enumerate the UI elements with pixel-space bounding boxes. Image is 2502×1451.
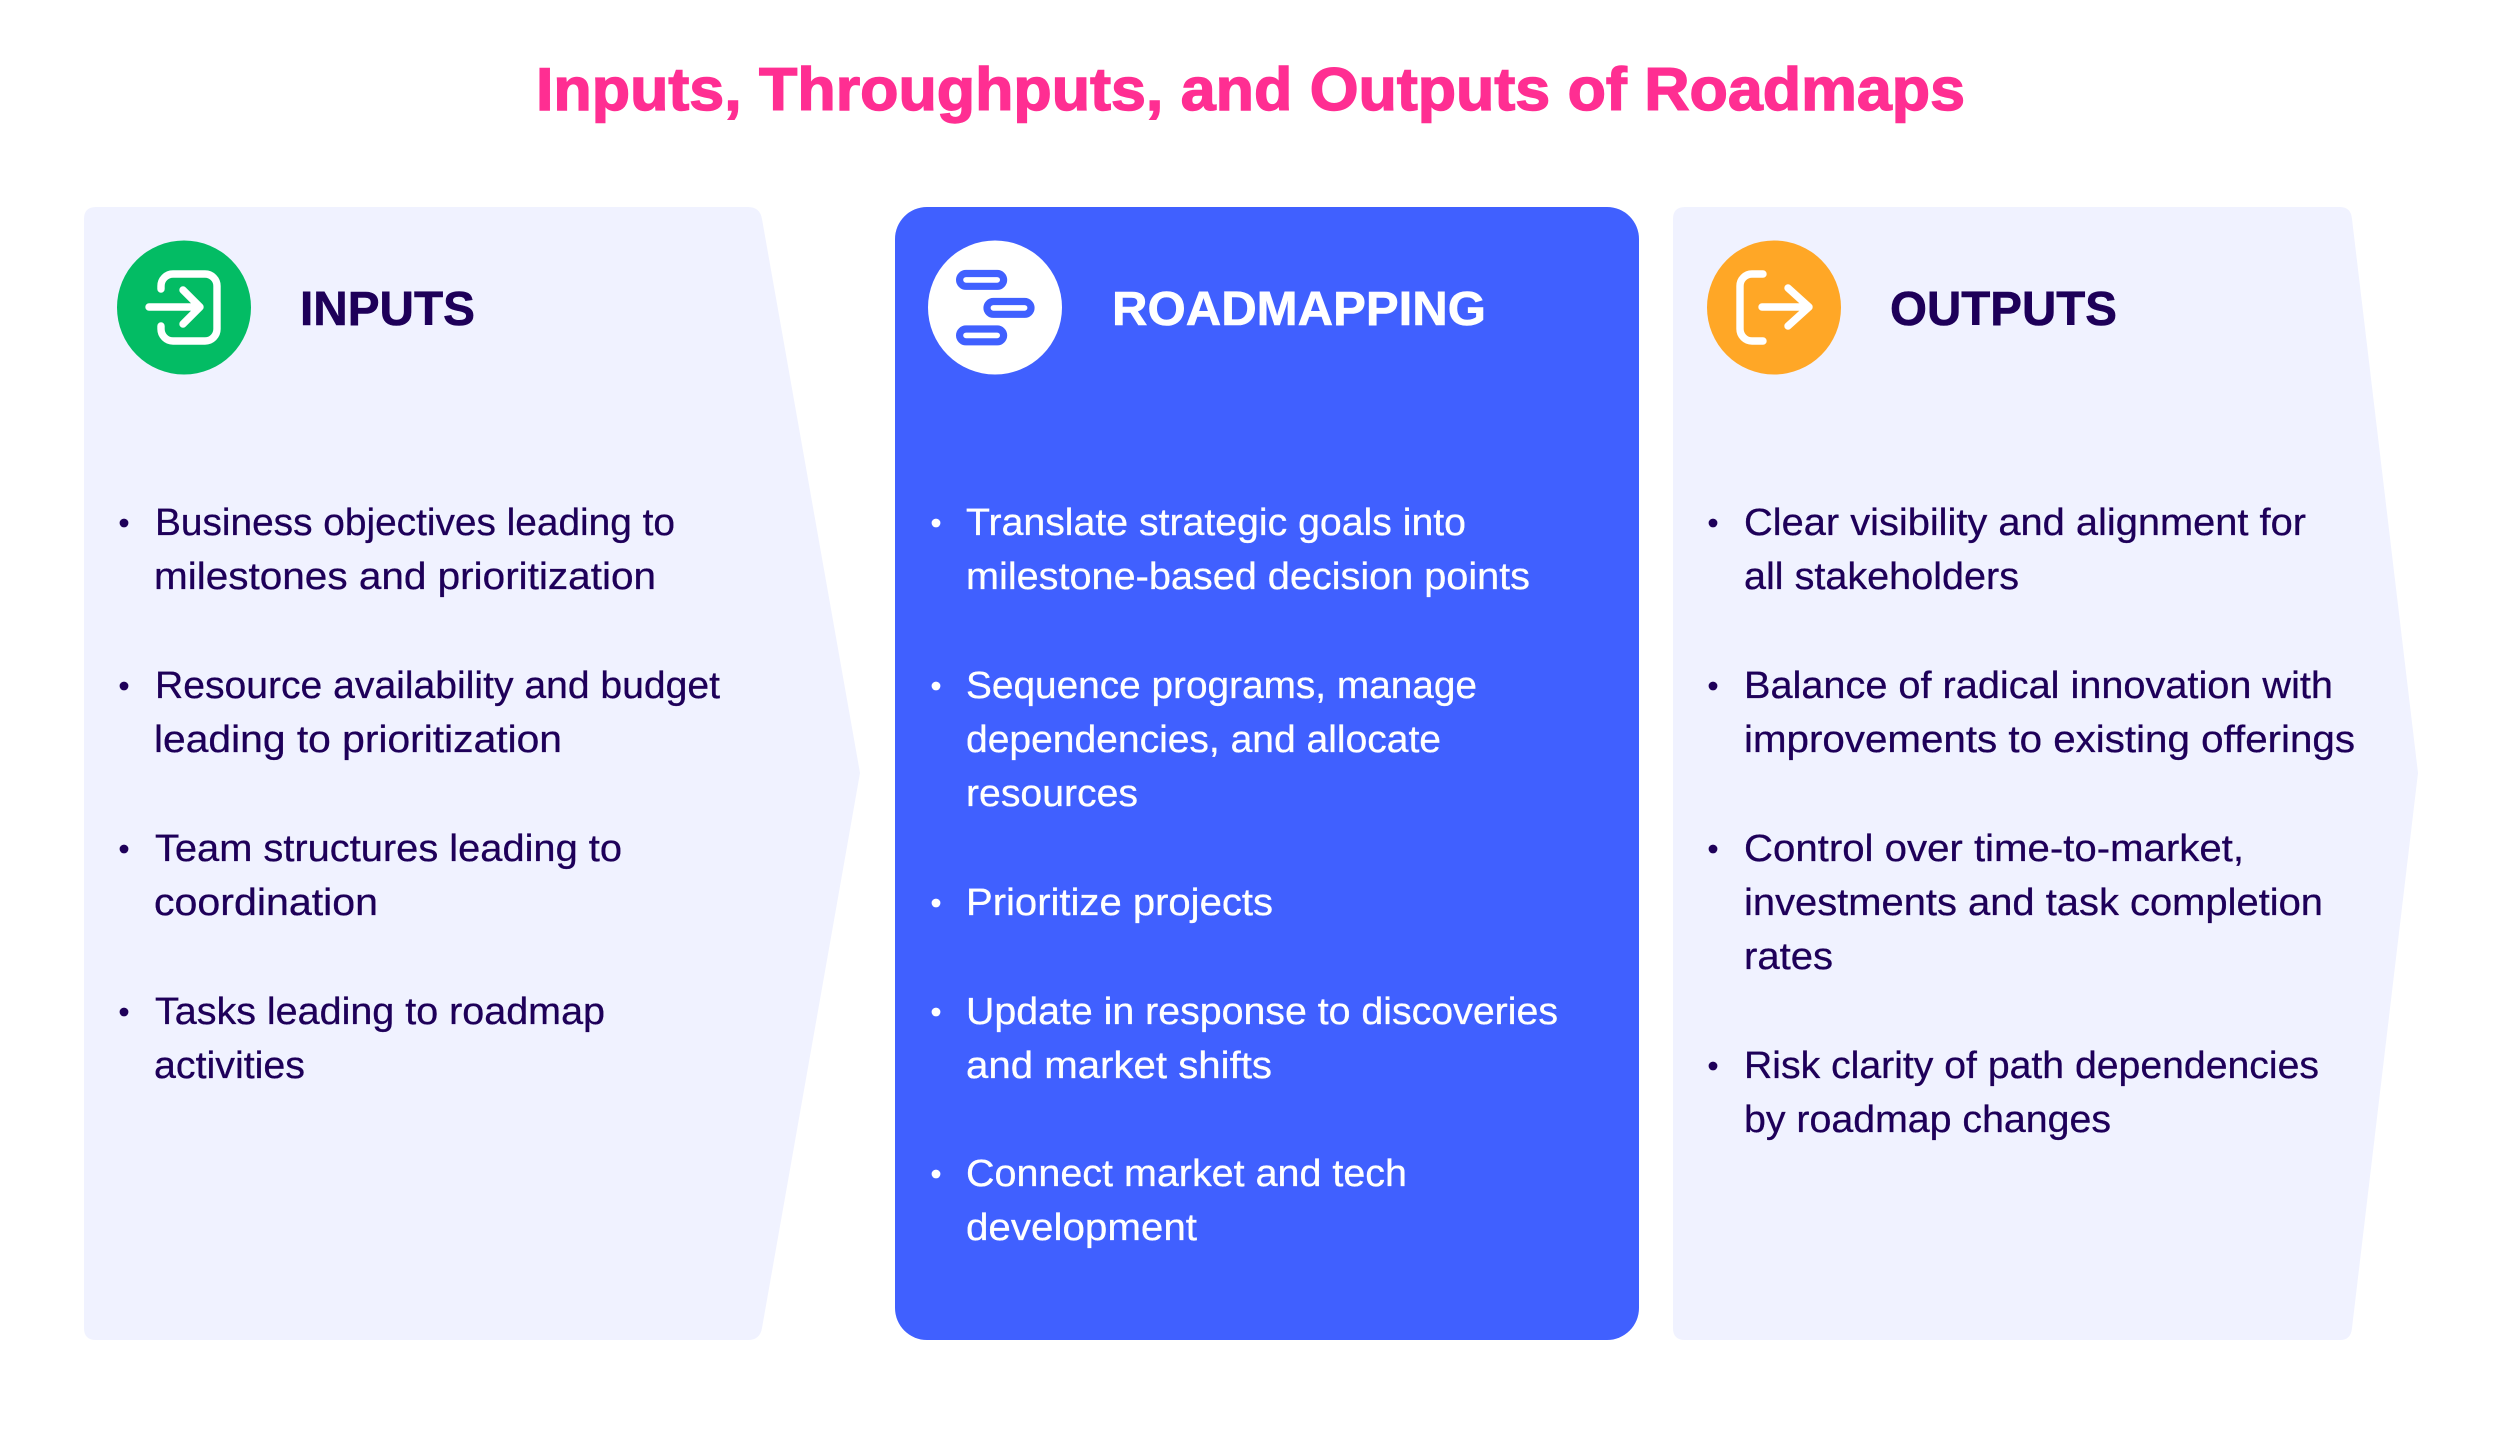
list: outputs: Risk clarity of path dependencies <box>1744 1045 2319 1087</box>
list: outputs: rates <box>1744 936 1833 978</box>
list: outputs: by roadmap changes <box>1744 1099 2111 1141</box>
list: roadmapping: development <box>966 1207 1197 1249</box>
heading: outputs: OUTPUTS <box>1890 283 2117 336</box>
title: Inputs, Throughputs, and Outputs of Roadmaps <box>536 56 1965 123</box>
list: outputs: Clear visibility and alignment for <box>1744 502 2306 544</box>
panel background: inputs arrow <box>84 207 860 1340</box>
list: inputs: milestones and prioritization <box>154 556 656 598</box>
list: outputs <box>1709 502 2355 1141</box>
heading: inputs: INPUTS <box>300 283 475 336</box>
list: outputs: Balance of radical innovation with <box>1744 665 2333 707</box>
list: inputs <box>120 502 720 1087</box>
list: inputs: Resource availability and budget <box>155 665 720 707</box>
icon: exit arrow <box>1707 240 1841 374</box>
list: inputs: Team structures leading to <box>155 828 622 870</box>
list: inputs: leading to prioritization <box>154 719 562 761</box>
list: roadmapping: Prioritize projects <box>966 882 1273 924</box>
heading: roadmapping: ROADMAPPING <box>1112 283 1486 336</box>
panel background: outputs arrow <box>1673 207 2418 1340</box>
list: roadmapping: Connect market and tech <box>966 1153 1407 1195</box>
list: outputs: all stakeholders <box>1744 556 2019 598</box>
list: roadmapping: Update in response to discoveries <box>966 991 1558 1033</box>
panel: outputs <box>1673 207 2418 1340</box>
icon: enter arrow <box>117 240 251 374</box>
list: roadmapping: dependencies, and allocate <box>966 719 1441 761</box>
list: roadmapping: Sequence programs, manage <box>966 665 1477 707</box>
list: outputs: improvements to existing offerings <box>1744 719 2355 761</box>
list: roadmapping: Translate strategic goals into <box>966 502 1466 544</box>
list: outputs: investments and task completion <box>1744 882 2323 924</box>
list: inputs: Tasks leading to roadmap <box>155 991 605 1033</box>
list: roadmapping: milestone-based decision points <box>966 556 1530 598</box>
panel: roadmapping <box>895 207 1639 1340</box>
list: outputs: Control over time-to-market, <box>1744 828 2244 870</box>
list: inputs: coordination <box>154 882 378 924</box>
panel: inputs <box>84 207 860 1340</box>
list: roadmapping: resources <box>966 773 1138 815</box>
panel background: roadmapping <box>895 207 1639 1340</box>
list: inputs: Business objectives leading to <box>155 502 675 544</box>
icon: roadmap bars <box>928 240 1062 374</box>
list: roadmapping: and market shifts <box>966 1045 1272 1087</box>
list: inputs: activities <box>154 1045 305 1087</box>
list: roadmapping <box>932 502 1558 1249</box>
